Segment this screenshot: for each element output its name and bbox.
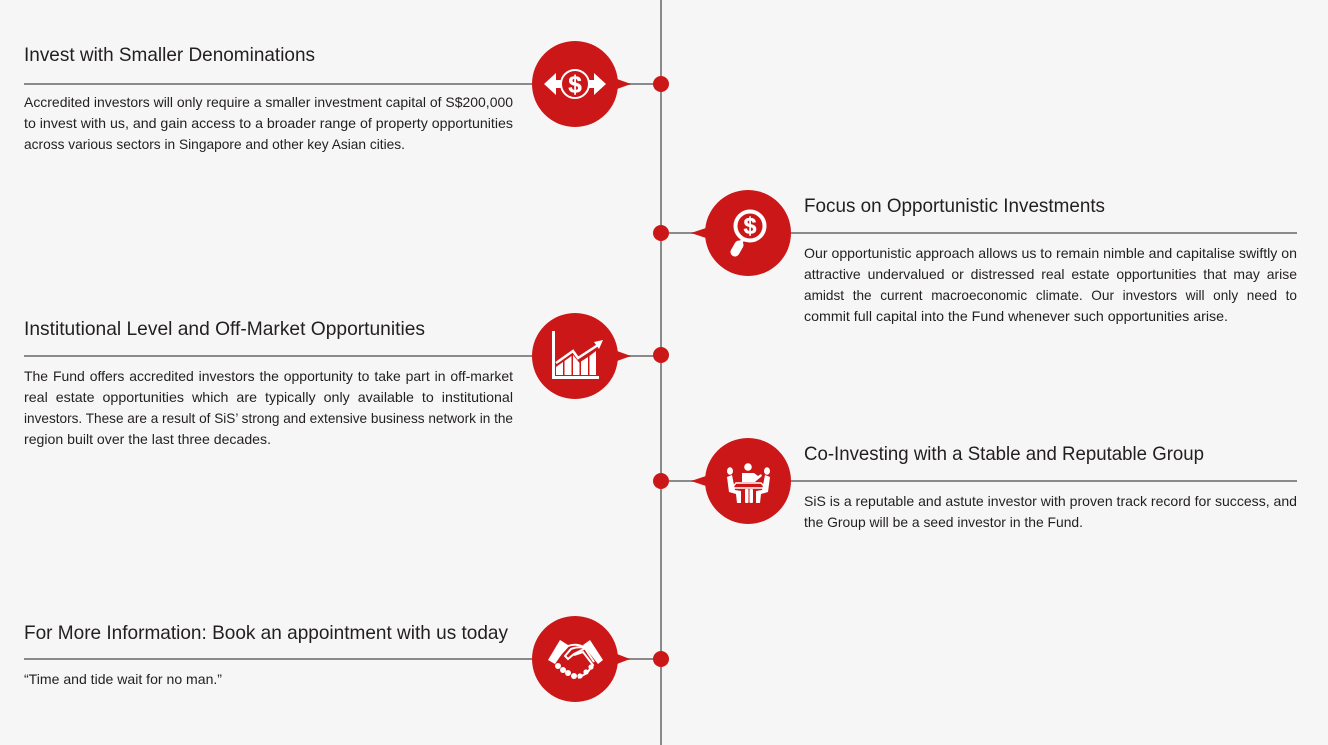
icon: magnifier with dollar: $ [744,213,757,239]
timeline axis [660,0,662,745]
body text: commit full capital into the Fund whenever such opportunities arise. [804,308,1228,324]
body text: SiS is a reputable and astute investor with proven track record for success, and [804,493,1297,509]
icon: meeting [691,438,791,524]
body text: across various sectors in Singapore and other key Asian cities. [24,136,405,152]
heading: Co-Investing with a Stable and Reputable Group [804,443,1204,465]
panel: co-investing [653,438,1297,530]
body text: “Time and tide wait for no man.” [24,671,222,687]
node [653,347,669,363]
body text [804,493,1297,530]
icon: magnifier with dollar [691,190,791,276]
body text [24,94,513,152]
icon: growth chart [532,313,631,399]
heading: For More Information: Book an appointment with us today [24,622,508,644]
node [653,76,669,92]
body text [804,245,1297,324]
panel: invest with smaller denominations [24,41,669,152]
body text: Our opportunistic approach allows us to remain nimble and capitalise swiftly on [804,245,1297,261]
body text: The Fund offers accredited investors the opportunity to take part in off-market [24,368,513,384]
icon: dollar with arrows: $ [568,72,582,98]
panel: focus on opportunistic investments [653,190,1297,324]
body text: Accredited investors will only require a smaller investment capital of S$200,000 [24,94,513,110]
icon: dollar with arrows [532,41,631,127]
body text: attractive undervalued or distressed real estate opportunities that may arise [804,266,1297,282]
node [653,225,669,241]
body text: to invest with us, and gain access to a broader range of property opportunities [24,115,513,131]
body text: region built over the last three decades. [24,431,271,447]
body text: the Group will be a seed investor in the Fund. [804,514,1083,530]
node [653,651,669,667]
heading: Institutional Level and Off-Market Opportunities [24,318,425,340]
body text [24,368,513,447]
icon: handshake [532,616,630,702]
node [653,473,669,489]
body text: amidst the current macroeconomic climate. Our investors will only need to [804,287,1297,303]
panel: institutional level and off-market opportunities [24,313,669,447]
body text: real estate opportunities which are typically only available to institutional [24,389,513,405]
heading: Focus on Opportunistic Investments [804,195,1105,217]
panel: for more information [24,616,669,702]
body text: investors. These are a result of SiS’ strong and extensive business network in the [24,410,513,426]
heading: Invest with Smaller Denominations [24,44,315,66]
